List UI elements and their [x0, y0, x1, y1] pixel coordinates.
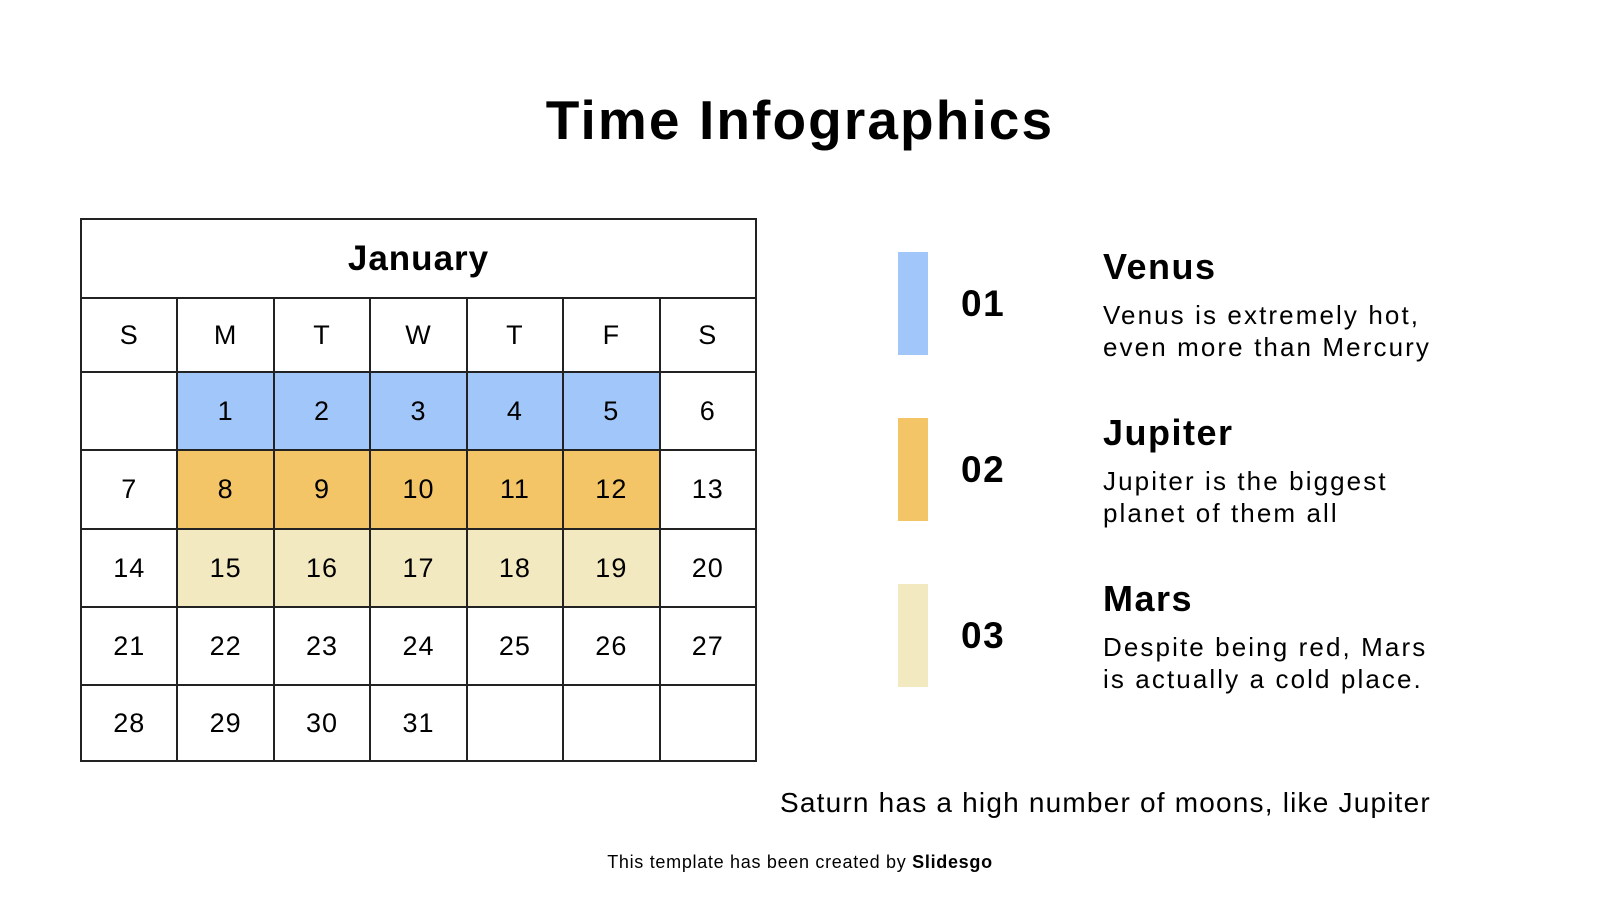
legend item: Jupiter: Jupiter — [1103, 412, 1234, 453]
calendar: 18 — [499, 552, 531, 582]
calendar: 10 — [402, 474, 434, 504]
legend item: Venus — [898, 246, 1431, 362]
legend item: Jupiter: planet of them all — [1103, 498, 1339, 528]
footer note: Saturn has a high number of moons, like Jupiter — [780, 787, 1431, 818]
legend item: Mars — [898, 578, 1427, 694]
legend item: Venus: 01 — [961, 283, 1005, 324]
calendar: S — [120, 320, 139, 350]
legend item: Mars: is actually a cold place. — [1103, 664, 1423, 694]
title: Time Infographics — [546, 89, 1054, 151]
calendar: 25 — [499, 630, 531, 660]
calendar: January — [348, 238, 489, 278]
calendar: 15 — [210, 552, 242, 582]
calendar: 3 — [410, 396, 426, 426]
calendar: 30 — [306, 708, 338, 738]
calendar: 11 — [500, 474, 530, 504]
calendar: 21 — [113, 630, 145, 660]
calendar: 4 — [507, 396, 523, 426]
calendar: 5 — [603, 396, 619, 426]
calendar: 14 — [113, 552, 145, 582]
calendar: 1 — [218, 396, 234, 426]
calendar: 6 — [700, 396, 716, 426]
legend item: Jupiter: Jupiter is the biggest — [1103, 466, 1388, 496]
calendar: W — [405, 320, 432, 350]
calendar: 31 — [402, 708, 434, 738]
calendar: M — [214, 320, 237, 350]
calendar: 28 — [113, 708, 145, 738]
legend item: Mars: Mars — [1103, 578, 1193, 619]
calendar: 8 — [218, 474, 234, 504]
legend item: Jupiter: 02 — [961, 449, 1005, 490]
legend item: Mars: 03 — [961, 615, 1005, 656]
calendar: 12 — [595, 474, 627, 504]
calendar: 17 — [402, 552, 434, 582]
calendar: S — [698, 320, 717, 350]
calendar: 24 — [402, 630, 434, 660]
calendar: 2 — [314, 396, 330, 426]
credits: This template has been created by Slidesgo — [607, 852, 993, 872]
legend item: Venus: Venus — [1103, 246, 1217, 287]
calendar: 13 — [692, 474, 724, 504]
calendar: F — [603, 320, 620, 350]
legend item: Mars: Despite being red, Mars — [1103, 632, 1427, 662]
calendar: 27 — [692, 630, 724, 660]
calendar — [80, 218, 757, 762]
calendar: T — [313, 320, 331, 350]
calendar: 23 — [306, 630, 338, 660]
calendar: 16 — [306, 552, 338, 582]
calendar: 22 — [210, 630, 242, 660]
calendar: 9 — [314, 474, 330, 504]
legend item: Jupiter — [898, 412, 1388, 528]
calendar: 7 — [121, 474, 137, 504]
legend item: Venus: even more than Mercury — [1103, 332, 1431, 362]
calendar: T — [506, 320, 524, 350]
calendar: 20 — [692, 552, 724, 582]
calendar: 19 — [595, 552, 627, 582]
calendar: 29 — [210, 708, 242, 738]
legend item: Venus: Venus is extremely hot, — [1103, 300, 1420, 330]
calendar: 26 — [595, 630, 627, 660]
